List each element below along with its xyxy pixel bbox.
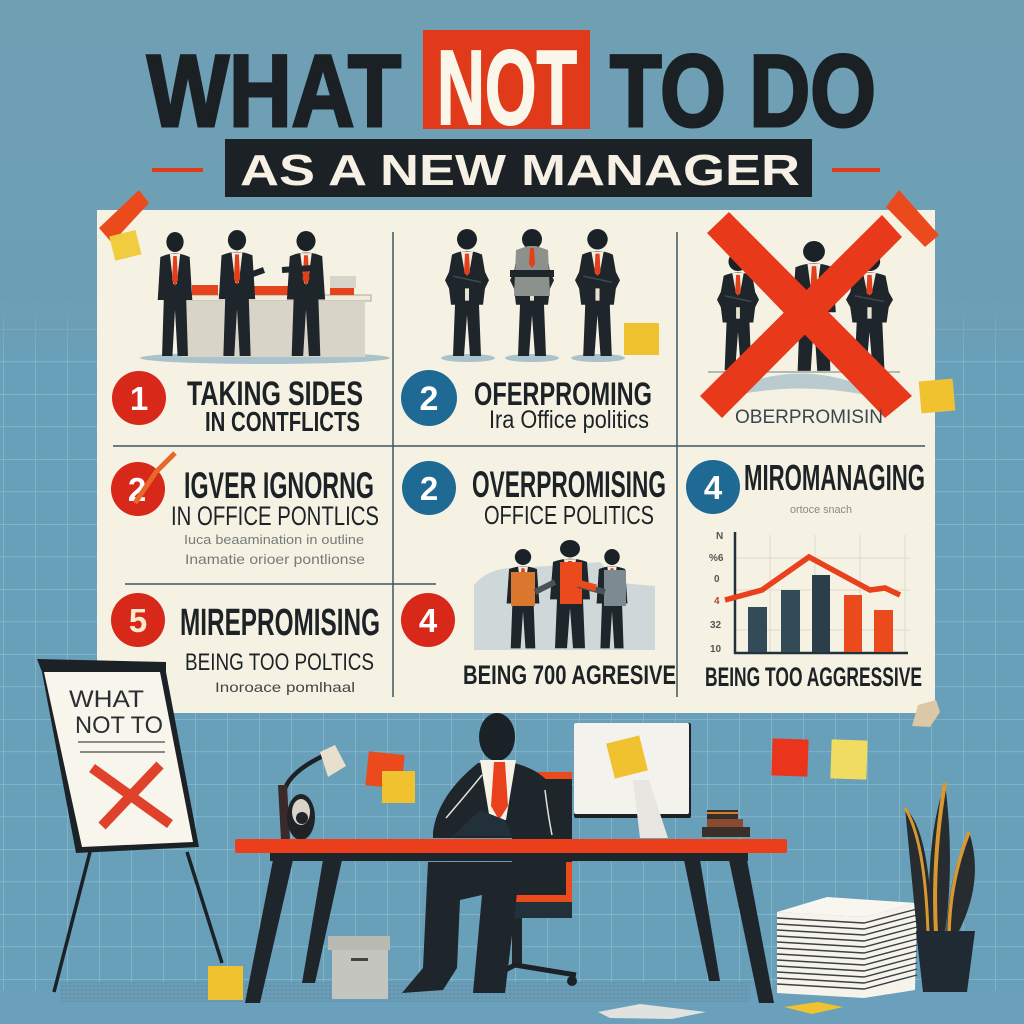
label: MIREPROMISING <box>180 602 380 644</box>
big red X <box>700 212 912 418</box>
title: TO DO <box>610 34 876 148</box>
flipchart: WHAT <box>69 686 144 713</box>
label: OVERPROMISING <box>472 464 666 505</box>
badge 5 <box>111 593 165 647</box>
label: Ira Office politics <box>489 406 649 434</box>
books <box>702 810 750 837</box>
label: IN OFFICE PONTLICS <box>171 501 379 531</box>
badge with check: 2 <box>128 471 146 508</box>
label: Inoroace pomlhaal <box>215 679 355 695</box>
bar chart: N <box>716 531 723 542</box>
sticky note by easel <box>208 966 243 1000</box>
badge 1 <box>112 371 166 425</box>
floor papers <box>598 1002 843 1019</box>
illustration: men behind X <box>708 241 900 402</box>
manager at desk <box>402 713 567 993</box>
desk <box>235 839 787 1003</box>
label <box>472 464 666 530</box>
label: OBERPROMISIN <box>735 407 883 428</box>
label: BEING TOO POLTICS <box>185 649 374 676</box>
badge with check <box>111 453 175 516</box>
bar chart: 10 <box>710 644 722 655</box>
cell 2: overpromising <box>401 229 659 434</box>
badge 4: 4 <box>419 602 438 639</box>
flipchart: NOT TO <box>75 712 163 739</box>
small caption: ortoce snach <box>790 504 852 516</box>
badge 4 <box>401 593 455 647</box>
chair <box>480 772 577 986</box>
title <box>147 29 876 148</box>
badge 2: 2 <box>420 380 438 418</box>
hands <box>453 810 512 836</box>
flipchart X <box>92 765 170 826</box>
label: BEING 700 AGRESIVE <box>463 660 676 690</box>
wastebin <box>328 936 390 999</box>
label: IN CONTFLICTS <box>205 406 360 437</box>
wall sticky notes <box>365 738 868 803</box>
cell 1: taking sides <box>112 230 390 437</box>
cell 5: overpromising <box>402 461 666 530</box>
poster panel <box>97 190 955 727</box>
potted plant <box>905 783 975 992</box>
subtitle banner <box>152 139 880 197</box>
bar chart: 0 <box>714 574 720 585</box>
bar chart <box>709 531 910 655</box>
illustration: three men <box>441 229 659 362</box>
label: OFFICE POLITICS <box>484 500 654 530</box>
grid lines <box>113 232 925 697</box>
sticky note <box>919 379 955 413</box>
desk lamp <box>278 745 346 840</box>
cell 7: miepromising <box>111 593 380 695</box>
label <box>171 465 379 567</box>
cell 4: ignoring <box>111 453 379 567</box>
label: IGVER IGNORNG <box>184 465 374 506</box>
flipchart <box>37 659 222 992</box>
bar chart: %6 <box>709 553 724 564</box>
label: Inamatie orioer pontlionse <box>185 551 365 567</box>
label: OFERPROMING <box>474 376 652 412</box>
label <box>187 375 363 437</box>
label: TAKING SIDES <box>187 375 363 413</box>
illustration: handshake <box>474 540 655 650</box>
badge 1: 1 <box>130 380 148 417</box>
label <box>474 376 652 434</box>
highlight: NOT: NOT <box>437 29 577 147</box>
paper stack <box>777 897 917 998</box>
badge 2 <box>402 461 456 515</box>
highlight: NOT <box>423 29 590 147</box>
tape corners <box>99 190 940 727</box>
badge 2 <box>401 370 457 426</box>
cell 3: crossed out <box>700 212 955 428</box>
monitor <box>574 723 691 838</box>
cell 6: micromanaging <box>686 457 925 692</box>
badge 2: 2 <box>420 470 438 507</box>
subtitle banner: AS A NEW MANAGER <box>240 146 800 195</box>
head <box>479 713 515 761</box>
label <box>180 602 380 695</box>
illustration: conflict at desk <box>140 230 390 364</box>
badge 4 <box>686 460 740 514</box>
cell 8: being too aggressive <box>401 540 676 690</box>
body <box>433 763 567 838</box>
bar chart: 32 <box>710 620 722 631</box>
badge 5: 5 <box>129 602 147 639</box>
legs <box>402 862 545 993</box>
title: WHAT <box>147 34 401 148</box>
badge 4: 4 <box>704 469 723 506</box>
tile wall <box>0 300 1024 1024</box>
label: Iuca beaamination in outline <box>184 532 364 547</box>
sticky note <box>624 323 659 355</box>
bar chart: 4 <box>714 596 720 607</box>
